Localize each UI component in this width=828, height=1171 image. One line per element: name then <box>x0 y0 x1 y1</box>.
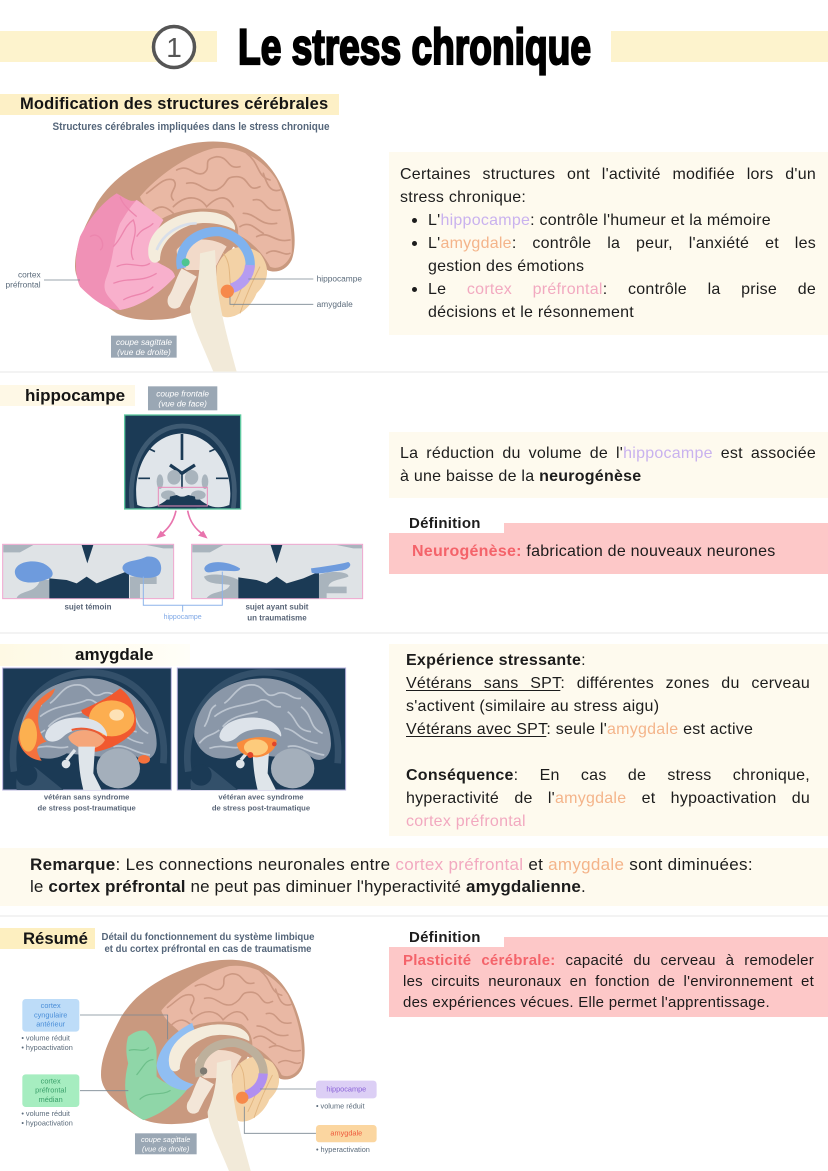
frontal brain section <box>125 415 241 509</box>
panel: structures modifiées: L'amygdale: contrôle la peur, l'anxiété et les <box>428 235 816 252</box>
label: cortex préfrontal médian: préfrontal <box>35 1086 67 1095</box>
summary brain diagram: Détail du fonctionnement du système limbique <box>102 932 315 943</box>
definition: neurogénèse <box>389 515 828 574</box>
hippocampus diagram: frontal section and two zooms: sujet témoin <box>64 602 112 611</box>
anterior cingulate cortex <box>157 1023 195 1090</box>
caption: coupe sagittale <box>111 336 177 358</box>
label: amygdale: • hyperactivation <box>316 1145 370 1154</box>
panel: structures modifiées: L'hippocampe: contrôle l'humeur et la mémoire <box>428 212 771 229</box>
panel: structures modifiées: gestion des émotions <box>428 258 584 275</box>
panel: structures modifiées: stress chronique: <box>400 189 526 206</box>
panel: neurogénèse <box>389 432 828 498</box>
caption: coupe sagittale: (vue de droite) <box>142 1144 189 1153</box>
title banner <box>0 19 828 75</box>
definition: plasticité cérébrale: Définition <box>409 929 481 946</box>
brain diagram: structures cérébrales: hippocampe <box>317 274 362 284</box>
panel: expérience stressante: Vétérans avec SPT: seule l'amygdale est active <box>406 721 753 738</box>
heading: Résumé: Résumé <box>23 929 88 948</box>
panel: structures modifiées <box>389 152 828 335</box>
caption: coupe sagittale: (vue de droite) <box>117 347 171 357</box>
caption: coupe sagittale <box>135 1133 197 1154</box>
caption: coupe sagittale: coupe sagittale <box>116 337 172 347</box>
hippocampus diagram: frontal section and two zooms: hippocampe <box>164 614 202 621</box>
panel: expérience stressante: hyperactivité de l'amygdale et hypoactivation du <box>406 790 810 807</box>
definition: plasticité cérébrale <box>389 929 828 1017</box>
icon: numbered circle: 1 <box>166 32 182 63</box>
panel: structures modifiées: décisions et le résonnement <box>428 304 634 321</box>
label: cortex cyngulaire antérieur: • volume réduit <box>21 1033 70 1042</box>
heading: amygdale: amygdale <box>75 645 153 664</box>
panel: neurogénèse: La réduction du volume de l'hippocampe est associée <box>400 445 816 462</box>
label: hippocampe: • volume réduit <box>316 1101 365 1110</box>
brain diagram: structures cérébrales <box>5 121 362 372</box>
caption: coupe sagittale: coupe sagittale <box>141 1135 190 1144</box>
label: cortex cyngulaire antérieur <box>21 999 79 1052</box>
label: cortex préfrontal médian: • hypoactivation <box>21 1119 73 1128</box>
definition: plasticité cérébrale: des expériences vécues. Elle permet l'apprentissage. <box>403 994 770 1011</box>
label: amygdale <box>316 1125 377 1154</box>
label: hippocampe: hippocampe <box>326 1085 366 1094</box>
amygdala scan: vétéran sans syndrome: de stress post-traumatique <box>38 803 136 812</box>
definition: neurogénèse: Neurogénèse: fabrication de nouveaux neurones <box>412 543 775 560</box>
label: cortex préfrontal médian: cortex <box>41 1076 61 1085</box>
heading: hippocampe <box>0 385 135 406</box>
panel: expérience stressante: s'activent (similaire au stress aigu) <box>406 698 659 715</box>
panel: remarque: Remarque: Les connections neuronales entre cortex préfrontal et amygdale sont diminuées: <box>30 855 753 874</box>
brain diagram: structures cérébrales: Structures cérébrales impliquées dans le stress chronique <box>52 121 330 133</box>
panel: expérience stressante <box>389 644 828 836</box>
amygdala scan: vétéran avec syndrome: vétéran avec syndrome <box>218 793 304 802</box>
heading: Résumé <box>0 928 95 949</box>
definition: plasticité cérébrale: Plasticité cérébrale: capacité du cerveau à remodeler <box>403 952 814 969</box>
panel: remarque: le cortex préfrontal ne peut pas diminuer l'hyperactivité amygdalienne. <box>30 877 586 896</box>
brain diagram: structures cérébrales: préfrontal <box>5 279 41 289</box>
title banner: Le stress chronique <box>238 19 591 75</box>
arrows <box>156 511 208 539</box>
label: cortex cyngulaire antérieur: • hypoactivation <box>21 1043 73 1052</box>
panel: expérience stressante: Expérience stressante: <box>406 652 586 669</box>
label: cortex préfrontal médian: médian <box>39 1095 63 1104</box>
heading: amygdale <box>0 644 190 666</box>
label: hippocampe <box>316 1081 377 1110</box>
caption: coupe frontale: coupe frontale <box>156 388 209 398</box>
activated regions <box>18 688 136 761</box>
label: cortex cyngulaire antérieur: antérieur <box>36 1020 66 1029</box>
panel: expérience stressante: Vétérans sans SPT: différentes zones du cerveau <box>406 675 810 692</box>
label: cortex cyngulaire antérieur: cortex <box>41 1001 61 1010</box>
heading: Modification des structures cérébrales: Modification des structures cérébrales <box>20 95 328 113</box>
zoom panel: sujet témoin <box>3 544 174 599</box>
caption: coupe frontale <box>148 386 217 410</box>
label: cortex cyngulaire antérieur: cyngulaire <box>34 1010 67 1019</box>
panel: remarque <box>0 848 828 906</box>
summary brain diagram <box>21 932 377 1171</box>
amygdala scan: vétéran sans syndrome: vétéran sans syndrome <box>44 793 129 802</box>
amygdala <box>221 285 234 298</box>
amygdala scan: vétéran sans syndrome <box>3 668 171 812</box>
caption: coupe frontale: (vue de face) <box>158 399 207 409</box>
panel: expérience stressante: Conséquence: En cas de stress chronique, <box>406 767 810 784</box>
hippocampus diagram: frontal section and two zooms: sujet ayant subit <box>245 602 309 611</box>
panel: structures modifiées: Certaines structures ont l'activité modifiée lors d'un <box>400 166 816 183</box>
amygdala scan: vétéran avec syndrome: de stress post-traumatique <box>212 803 310 812</box>
prefrontal cortex <box>76 193 175 310</box>
hippocampus <box>181 232 250 270</box>
label: cortex préfrontal médian <box>21 1074 79 1128</box>
zoom panel: sujet ayant subi un traumatisme <box>192 544 363 599</box>
heading: hippocampe: hippocampe <box>25 386 125 405</box>
amygdala scan: vétéran avec syndrome <box>177 668 346 812</box>
definition: plasticité cérébrale: les circuits neuronaux en fonction de l'environnement et <box>403 973 814 990</box>
summary brain diagram: et du cortex préfrontal en cas de traumatisme <box>104 944 312 955</box>
panel: structures modifiées: Le cortex préfrontal: contrôle la prise de <box>428 281 816 298</box>
icon: numbered circle <box>154 26 194 68</box>
hippocampus diagram: frontal section and two zooms: un traumatisme <box>247 613 307 622</box>
amygdala activation <box>237 737 277 758</box>
label: cortex préfrontal médian: • volume réduit <box>21 1109 70 1118</box>
brain diagram: structures cérébrales: cortex <box>18 270 41 280</box>
brain diagram: structures cérébrales: amygdale <box>317 299 353 309</box>
label: amygdale: amygdale <box>330 1129 362 1138</box>
hippocampus diagram: frontal section and two zooms <box>3 386 363 622</box>
definition: neurogénèse: Définition <box>409 515 481 532</box>
panel: expérience stressante: cortex préfrontal <box>406 813 526 830</box>
median prefrontal cortex <box>125 1030 187 1120</box>
panel: neurogénèse: à une baisse de la neurogénèse <box>400 468 641 485</box>
